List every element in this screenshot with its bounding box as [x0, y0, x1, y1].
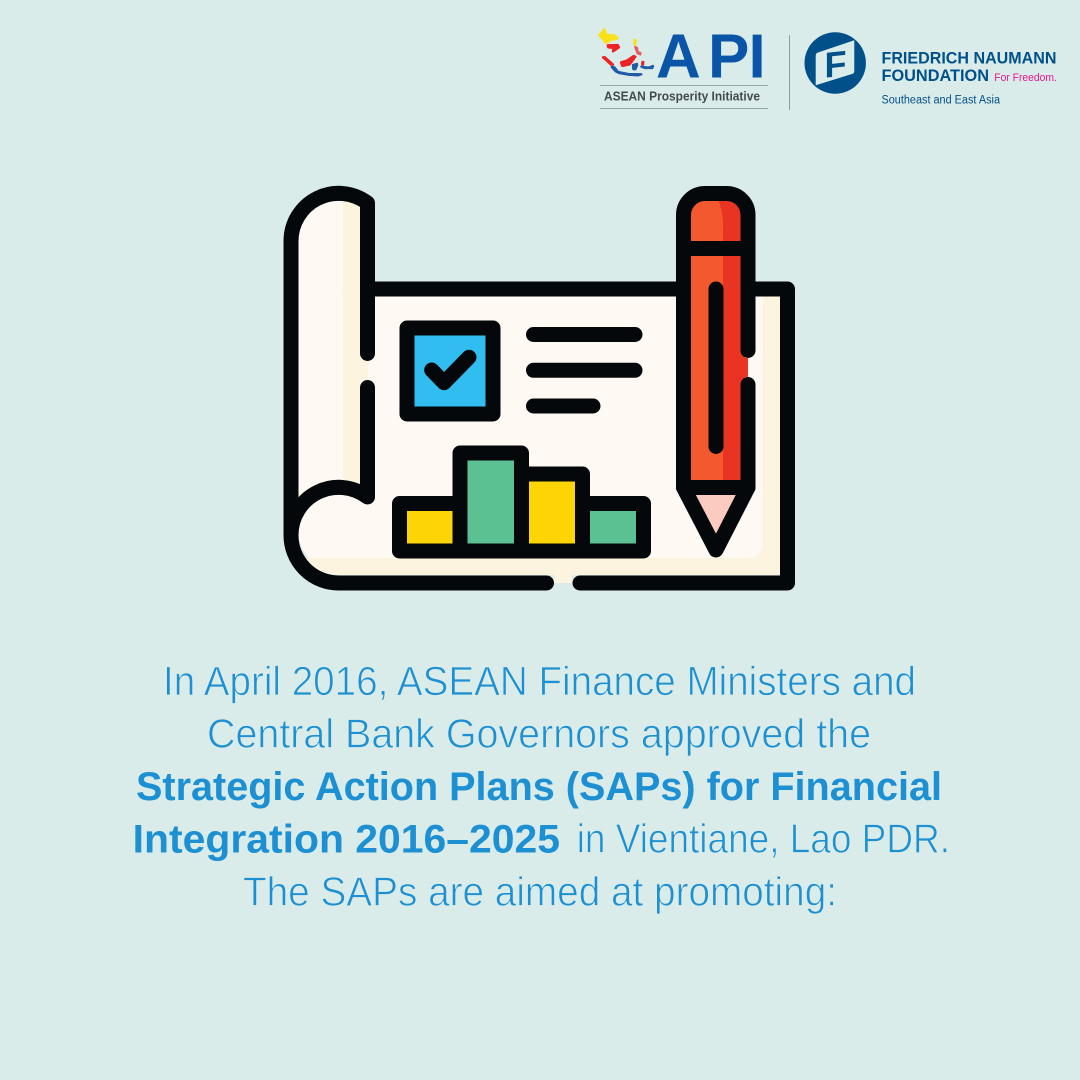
- tagline: ASEAN Prosperity Initiative: [604, 90, 760, 104]
- rule below tagline: [600, 108, 768, 109]
- region: Southeast and East Asia: [882, 94, 1001, 106]
- line 4 regular: in Vientiane, Lao PDR.: [577, 816, 950, 862]
- line 5: The SAPs are aimed at promoting:: [243, 869, 837, 915]
- rule above tagline: [600, 85, 768, 86]
- paper sheet: [298, 201, 780, 583]
- checkbox: [407, 328, 493, 414]
- foundation name line 2: FOUNDATION: [882, 67, 989, 85]
- bar chart: [400, 453, 644, 551]
- slogan: For Freedom.: [994, 72, 1057, 84]
- body text: [133, 658, 950, 915]
- pencil: [684, 194, 748, 550]
- icon: blueprint plan with pencil: [291, 193, 788, 583]
- line 1: In April 2016, ASEAN Finance Ministers and: [163, 658, 916, 704]
- paper outline: [291, 193, 788, 583]
- API wordmark: API: [656, 23, 766, 92]
- line 4 bold: Integration 2016–2025: [133, 818, 560, 862]
- logo: ASEAN Prosperity Initiative: [599, 23, 768, 109]
- icon: foundation emblem: [804, 32, 866, 94]
- line 3 bold: Strategic Action Plans (SAPs) for Financial: [136, 765, 942, 809]
- icon: Southeast Asia map: [599, 29, 653, 75]
- logo: Friedrich Naumann Foundation: [804, 32, 1057, 106]
- foundation name: FRIEDRICH NAUMANN: [882, 49, 1056, 67]
- logo divider: [789, 35, 790, 110]
- text lines: [534, 334, 635, 406]
- icon: foundation emblem: F: [824, 43, 847, 86]
- line 2: Central Bank Governors approved the: [207, 711, 871, 757]
